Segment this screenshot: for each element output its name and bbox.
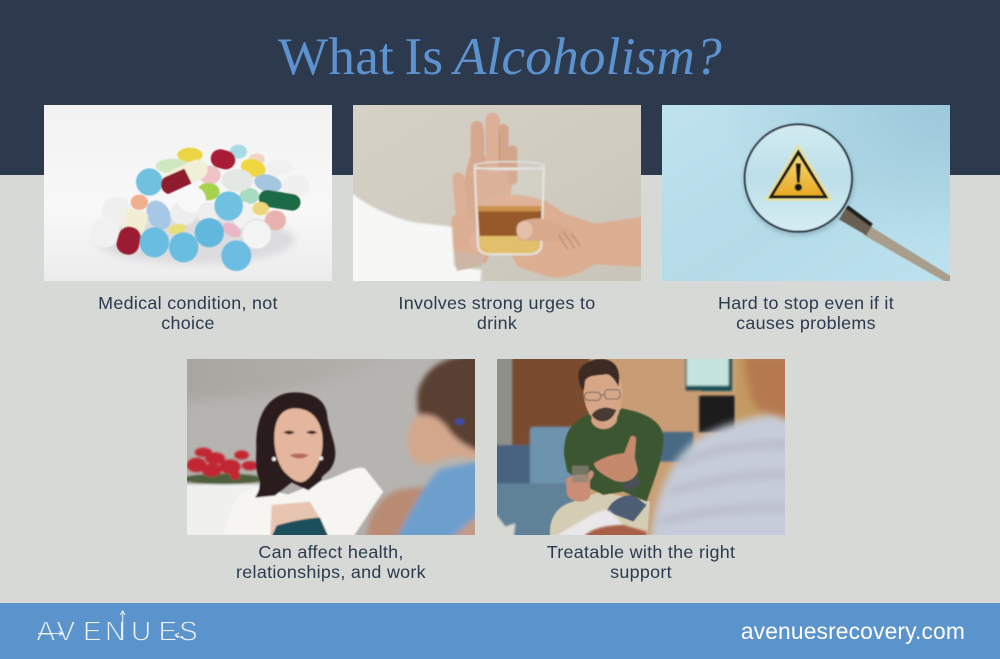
caption: strong urges (398, 293, 596, 333)
caption: treatable (547, 542, 735, 582)
caption: hard to stop (718, 293, 894, 333)
caption: treatable: Treatable with the right (547, 542, 735, 562)
photo: two women talking (187, 359, 475, 535)
caption: medical condition: Medical condition, not (98, 293, 278, 313)
caption: treatable: support (610, 562, 672, 582)
photo: hand refusing a glass of alcohol (353, 105, 641, 281)
glass and offering hand (469, 162, 642, 278)
sleeve (343, 186, 482, 300)
caption: health, relationships, work: Can affect health, (258, 542, 404, 562)
caption: medical condition (98, 293, 278, 333)
caption: strong urges: drink (477, 313, 517, 333)
raised hand (451, 120, 513, 263)
dark header band (0, 0, 1000, 175)
photo: pills (44, 105, 332, 281)
caption: hard to stop: Hard to stop even if it (718, 293, 894, 313)
photo: man in therapy session (497, 359, 785, 535)
caption: health, relationships, work (236, 542, 426, 582)
footer band (0, 603, 1000, 659)
photo: warning sign under a magnifying glass (662, 105, 950, 281)
caption: strong urges: Involves strong urges to (398, 293, 596, 313)
website url: avenuesrecovery.com (741, 618, 965, 644)
caption: hard to stop: causes problems (736, 313, 876, 333)
logo: Avenues: AVENUES (36, 616, 198, 647)
caption: medical condition: choice (161, 313, 215, 333)
title: What Is Alcoholism? (278, 27, 722, 86)
caption: health, relationships, work: relationships, and work (236, 562, 426, 582)
